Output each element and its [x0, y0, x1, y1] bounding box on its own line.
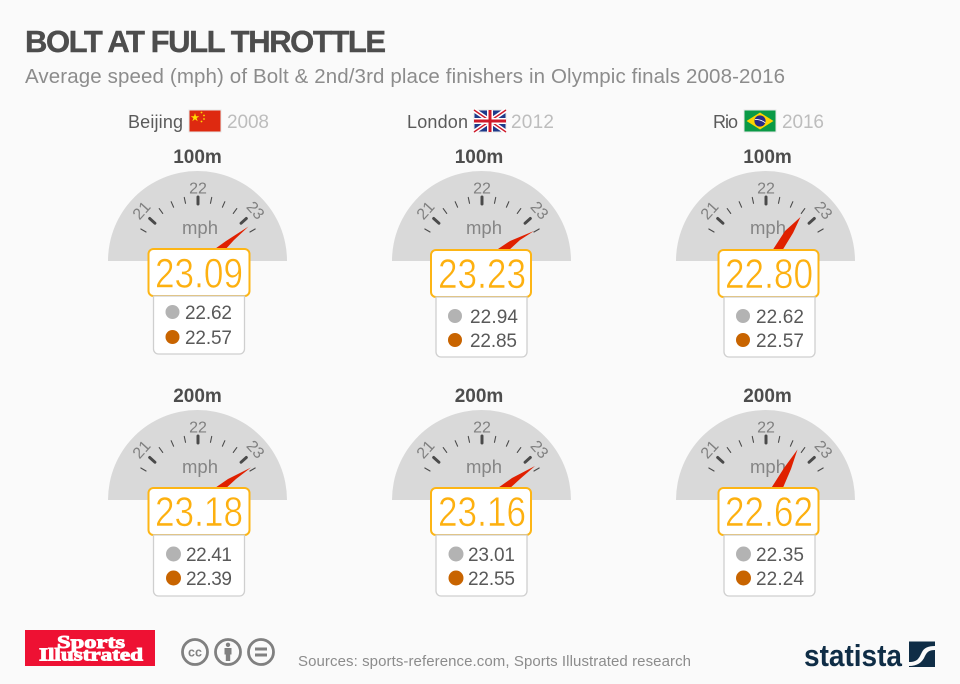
panel: London 100m gauge	[392, 147, 571, 357]
logo: Sports Illustrated: Illustrated	[39, 644, 143, 664]
column header: Beijing 2008: 2008	[227, 112, 269, 133]
panel: Rio 100m gauge	[676, 147, 855, 357]
speed display: 22.80	[725, 250, 813, 297]
scale labels	[414, 180, 551, 223]
scale labels: 21	[130, 438, 154, 462]
icon: China flag	[189, 110, 221, 132]
unit label: mph	[182, 217, 218, 238]
unit label: mph	[466, 456, 502, 477]
gauge dial	[108, 171, 287, 261]
gauge dial	[676, 171, 855, 261]
scale labels: 21	[414, 199, 438, 223]
icon: creative commons licence: cc	[188, 646, 202, 660]
scale labels: 22	[189, 180, 207, 198]
other medalists: 22.35	[756, 545, 804, 566]
other medalists: 22.62	[185, 303, 232, 324]
speed display: 22.62	[725, 488, 813, 535]
needle	[212, 468, 251, 490]
needle	[770, 450, 798, 490]
panel: Beijing 200m gauge	[108, 386, 287, 596]
logo: statista: statista	[804, 638, 903, 673]
scale labels: 21	[698, 199, 722, 223]
scale labels: 23	[527, 438, 551, 462]
other medalists	[154, 296, 244, 354]
column header: Rio 2016: Rio	[713, 112, 738, 132]
other medalists: 22.41	[186, 545, 232, 566]
speed display: 23.09	[155, 250, 243, 296]
scale labels: 22	[473, 180, 491, 198]
scale labels: 23	[243, 199, 267, 223]
column header: London 2012: London	[407, 112, 468, 132]
scale labels	[698, 420, 835, 462]
unit label: mph	[182, 456, 218, 477]
scale labels	[414, 420, 551, 462]
column header: Rio 2016: 2016	[782, 112, 824, 133]
scale labels: 21	[130, 199, 154, 223]
scale labels	[130, 420, 267, 462]
panel: Beijing 100m gauge	[108, 147, 287, 354]
event label: 200m	[743, 386, 792, 407]
other medalists: 22.57	[185, 328, 232, 349]
other medalists: 22.85	[470, 331, 517, 352]
icon: Brazil flag	[744, 110, 776, 132]
other medalists: 22.57	[756, 331, 804, 352]
icon: UK flag	[474, 110, 506, 132]
gauge ticks	[141, 197, 255, 232]
title: BOLT AT FULL THROTTLE	[25, 24, 386, 59]
source note: Sources: sports-reference.com, Sports Illustrated research	[298, 653, 691, 670]
gauge ticks	[141, 436, 255, 471]
unit label: mph	[750, 456, 786, 477]
gauge dial	[392, 171, 571, 261]
scale labels: 22	[757, 420, 775, 436]
column header: Rio 2016	[713, 110, 824, 133]
needle	[772, 217, 800, 251]
speed display: 23.18	[155, 488, 243, 535]
column header: London 2012	[407, 110, 554, 133]
other medalists	[154, 535, 244, 596]
other medalists	[436, 535, 527, 596]
event label: 100m	[455, 147, 503, 168]
subtitle: Average speed (mph) of Bolt & 2nd/3rd place finishers in Olympic finals 2008-2016	[25, 65, 785, 88]
other medalists: 22.39	[186, 569, 232, 590]
unit label: mph	[466, 217, 502, 238]
scale labels: 23	[243, 438, 267, 462]
event label: 200m	[455, 386, 503, 407]
needle	[212, 226, 248, 251]
event label: 100m	[173, 147, 222, 168]
event label: 200m	[173, 386, 222, 407]
scale labels: 23	[527, 199, 551, 223]
other medalists: 22.55	[468, 569, 515, 590]
needle	[495, 231, 534, 251]
other medalists: 23.01	[468, 545, 515, 566]
column header: London 2012: 2012	[511, 112, 554, 133]
gauge dial	[108, 410, 287, 500]
scale labels: 22	[757, 180, 775, 198]
icon: creative commons licence	[182, 640, 274, 664]
speed display: 23.23	[438, 250, 526, 297]
other medalists	[724, 535, 815, 596]
panel: Rio 200m gauge	[676, 386, 855, 596]
speed display: 23.16	[438, 488, 526, 535]
scale labels	[130, 180, 267, 223]
gauge ticks	[709, 436, 823, 471]
scale labels: 23	[811, 199, 835, 223]
gauge dial	[392, 410, 571, 500]
gauge ticks	[425, 436, 539, 471]
scale labels: 21	[698, 438, 722, 462]
scale labels: 21	[414, 438, 438, 462]
needle	[495, 466, 535, 490]
column header: Beijing 2008: Beijing	[128, 112, 183, 132]
scale labels: 22	[189, 420, 207, 436]
other medalists	[724, 297, 815, 357]
scale labels: 23	[811, 438, 835, 462]
other medalists: 22.62	[756, 307, 804, 328]
gauge ticks	[709, 197, 823, 232]
event label: 100m	[743, 147, 792, 168]
gauge dial	[676, 410, 855, 500]
scale labels	[698, 180, 835, 223]
gauge ticks	[425, 197, 539, 232]
unit label: mph	[750, 217, 786, 238]
logo: Sports Illustrated	[25, 630, 155, 666]
logo: Sports Illustrated: Sports	[57, 632, 125, 652]
column header: Beijing 2008	[128, 110, 269, 133]
panel: London 200m gauge	[392, 386, 571, 596]
other medalists	[436, 297, 527, 357]
scale labels: 22	[473, 420, 491, 436]
other medalists: 22.24	[756, 569, 804, 590]
other medalists: 22.94	[470, 307, 518, 328]
